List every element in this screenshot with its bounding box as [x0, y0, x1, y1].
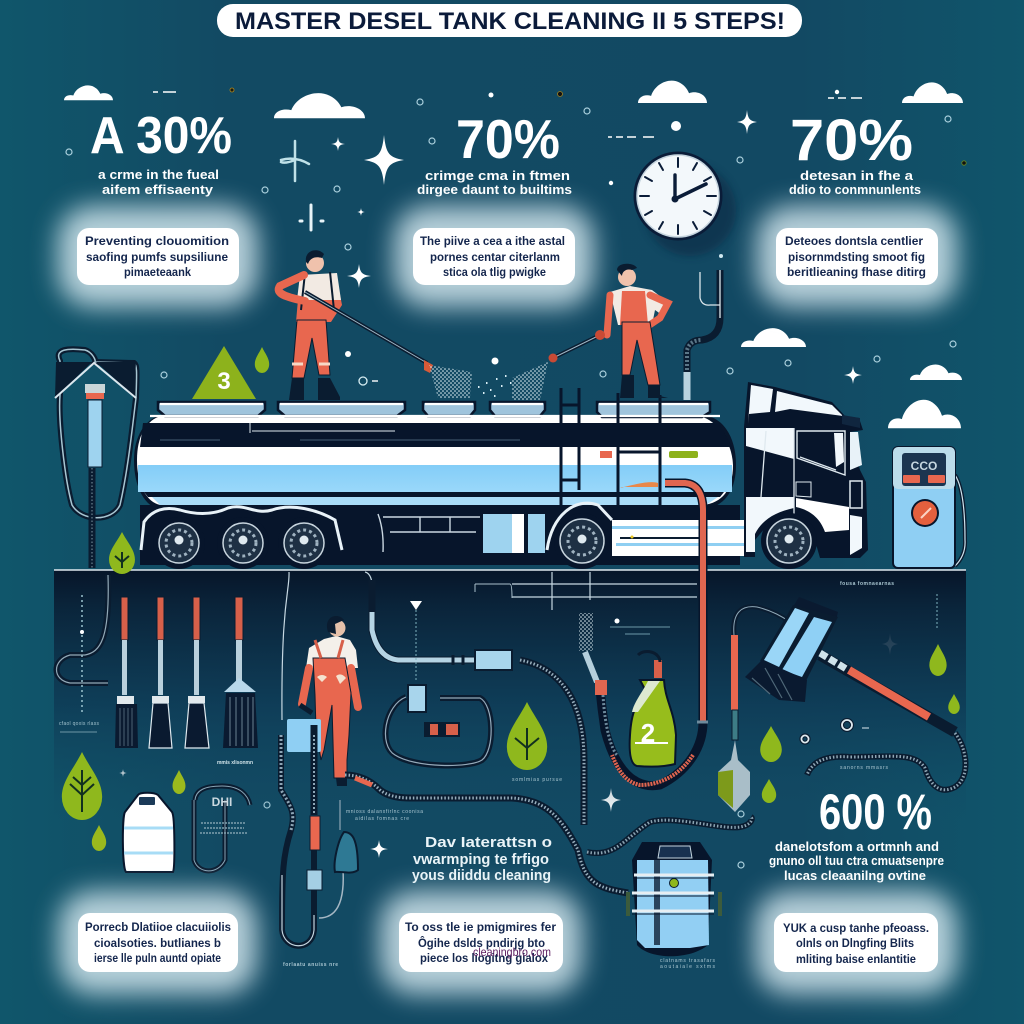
window [797, 431, 845, 475]
wheel arches [141, 503, 612, 550]
hose loop with filter [385, 685, 491, 765]
overalls [313, 658, 351, 778]
card: top centre [394, 206, 594, 307]
tank hatches [158, 402, 710, 417]
card: bottom left [59, 891, 257, 994]
arms [302, 668, 358, 707]
brush 1 [115, 597, 138, 748]
fuel pump: CCO [911, 459, 937, 473]
icon: portable tank [626, 842, 722, 956]
small caption: brushes: mmis xlisonmn [217, 760, 253, 766]
title banner: MASTER DESEL TANK CLEANING II 5 STEPS! [235, 8, 785, 35]
boots [336, 778, 347, 786]
badge: green triangle 3 [192, 346, 256, 399]
stat: A 30%: aifem effisaenty [102, 182, 214, 197]
card: bottom right: YUK a cusp tanhe pfeoass. [783, 923, 929, 935]
head [328, 620, 346, 636]
small caption: left tool: cfaol qoxis rlass [59, 721, 100, 727]
tool: hose loop left [56, 575, 108, 732]
watermark: cleaningbro.com [473, 945, 551, 959]
roof panels [748, 385, 773, 424]
card: top left: pimaeteaank [124, 267, 192, 279]
card: bottom left: ierse lle puln auntd opiate [94, 953, 221, 965]
blue case [287, 719, 321, 752]
captions: centre: sanorns mmasrs [840, 765, 888, 771]
small marks near brush [801, 594, 937, 743]
hose: vent pipe behind cab [687, 270, 720, 400]
worker: washing tank left [279, 250, 433, 400]
stat: 70% right: 70% [790, 108, 913, 173]
spray droplets [478, 376, 513, 396]
stat: 600%: lucas cleaanilng ovtine [784, 868, 926, 883]
worker: washing tank right [548, 264, 669, 398]
hose and lance: centre left [281, 725, 343, 946]
cab silhouette [744, 382, 868, 558]
icon: spray wand [579, 613, 670, 695]
icon: pendant drop [335, 832, 358, 873]
head frame [760, 605, 838, 681]
front wheel [761, 513, 817, 569]
stat: bottom middle heading [412, 834, 552, 884]
stat: 70% centre [417, 108, 572, 197]
captions: centre: aoutaiale sxtms [660, 964, 716, 970]
icon: big scrub brush [745, 597, 955, 732]
card: top centre: stica ola tlig pwigke [443, 267, 546, 279]
brush 2 [149, 597, 172, 748]
stat: 70% right: detesan in fhe a [800, 168, 914, 183]
tanker trailer [134, 388, 755, 569]
card: bottom right: olnls on Dlngfing Blits [796, 938, 914, 950]
under-deck lines [282, 572, 697, 720]
tank body [134, 415, 736, 510]
brush set [115, 597, 258, 748]
card: top centre: pornes centar citerlanm [430, 252, 560, 264]
shirt [306, 636, 358, 668]
chassis [140, 505, 755, 565]
card: bottom centre: Ôgihe dslds pndirjg bto [418, 937, 545, 950]
hatch highlights [150, 404, 720, 416]
spray left [429, 365, 472, 398]
brush 4 [223, 597, 258, 748]
icon: clock [634, 152, 736, 256]
cab lower panel [796, 498, 849, 532]
captions: centre [283, 581, 894, 970]
stat: 70% right [789, 108, 921, 197]
card: bottom right: mliting baise enlantitie [796, 954, 916, 966]
stat: 70% right: ddio to conmnunlents [789, 182, 921, 197]
hose: brush return [807, 733, 966, 790]
icon: long brush with hose [718, 607, 790, 812]
card: bottom right [755, 891, 957, 994]
pipe and connector: centre top [372, 580, 512, 680]
card: top right: pisornmdsting smoot fig [788, 252, 925, 264]
front grille and bumper [850, 432, 862, 470]
icon: leaves [62, 347, 960, 851]
card: top right: beritlieaning fhase ditirg [787, 267, 926, 279]
card: bottom left: cioalsoties. butlianes b [94, 938, 221, 950]
captions: centre: mnioss dalanxfirlnc coonisa [346, 809, 423, 815]
stat: 600%: gnuno oll tuu ctra cmuatsenpre [769, 853, 944, 868]
worker: standing with hose [287, 616, 358, 786]
wheels [153, 513, 610, 569]
stat: bottom middle heading: yous diiddu cleaning [412, 867, 551, 884]
captions: centre: somlmias pursue [512, 777, 562, 783]
card: bottom left: Porrecb Dlatiioe clacuiiolis [85, 922, 231, 934]
card: bottom centre: piece los liogitng gialox [420, 953, 549, 965]
card: top right [757, 206, 957, 307]
stat: bottom middle heading: Dav Iaterattsn o [425, 834, 552, 851]
stat: 70% centre: dirgee daunt to builtims [417, 182, 572, 197]
bottom bristles [745, 660, 807, 702]
spray right [512, 362, 548, 400]
card: bottom centre [380, 891, 582, 994]
stat: 70% centre: crimge cma in ftmen [425, 168, 570, 183]
stat: A 30%: a crme in the fueal [98, 167, 219, 182]
icon: gauge hose [194, 786, 250, 871]
icon: green bottle 2: 2 [641, 718, 655, 748]
captions: centre: fousa fomnaearnas [840, 581, 894, 587]
icon: green bottle 2 [630, 651, 676, 767]
ground line [54, 569, 966, 571]
card: top left [58, 206, 258, 307]
brush 3 [185, 597, 209, 748]
door upper white [746, 428, 794, 459]
icon: left pressure tool [55, 349, 137, 568]
card: top left: saofing pumfs supsiliune [86, 252, 228, 264]
card: top right: Deteoes dontsla centlier [785, 236, 924, 248]
stat: bottom middle heading: vwarmping te frfigo [413, 851, 549, 868]
card: top left: Preventing clouomition [85, 236, 229, 248]
icon: white jug [123, 793, 174, 872]
decorative clouds, stars and dots [64, 81, 966, 868]
stat: 70% centre: 70% [456, 108, 560, 170]
stat: A 30%: A 30% [90, 107, 232, 165]
card: top centre: The piive a cea a ithe astal [420, 236, 565, 248]
ladders [561, 388, 660, 515]
icon: gauge hose: DHI [212, 795, 232, 809]
stat: 600% [769, 784, 944, 883]
card: bottom centre: To oss tle ie pmigmires fer [405, 922, 557, 934]
top bristles [793, 597, 838, 620]
hose: long corrugated network [345, 660, 752, 893]
door lower white [746, 497, 794, 552]
badge: green triangle 3: 3 [217, 368, 231, 395]
door divider [761, 428, 794, 520]
blue strips [764, 608, 809, 667]
straps and pockets [315, 640, 343, 658]
stat: 600%: danelotsfom a ortmnh and [775, 839, 939, 854]
stat: 600%: 600 % [819, 784, 932, 840]
captions: centre: forlaatu anuiss nre [283, 962, 338, 968]
hose: red delivery hose [600, 483, 708, 786]
stat: A 30% [90, 107, 232, 197]
fuel pump [893, 447, 965, 568]
captions: centre: aidilas fomnas cre [355, 816, 409, 822]
lower panel backdrop [54, 570, 966, 1024]
captions: centre: clatnams trasafars [660, 958, 716, 964]
truck cab [744, 382, 868, 569]
